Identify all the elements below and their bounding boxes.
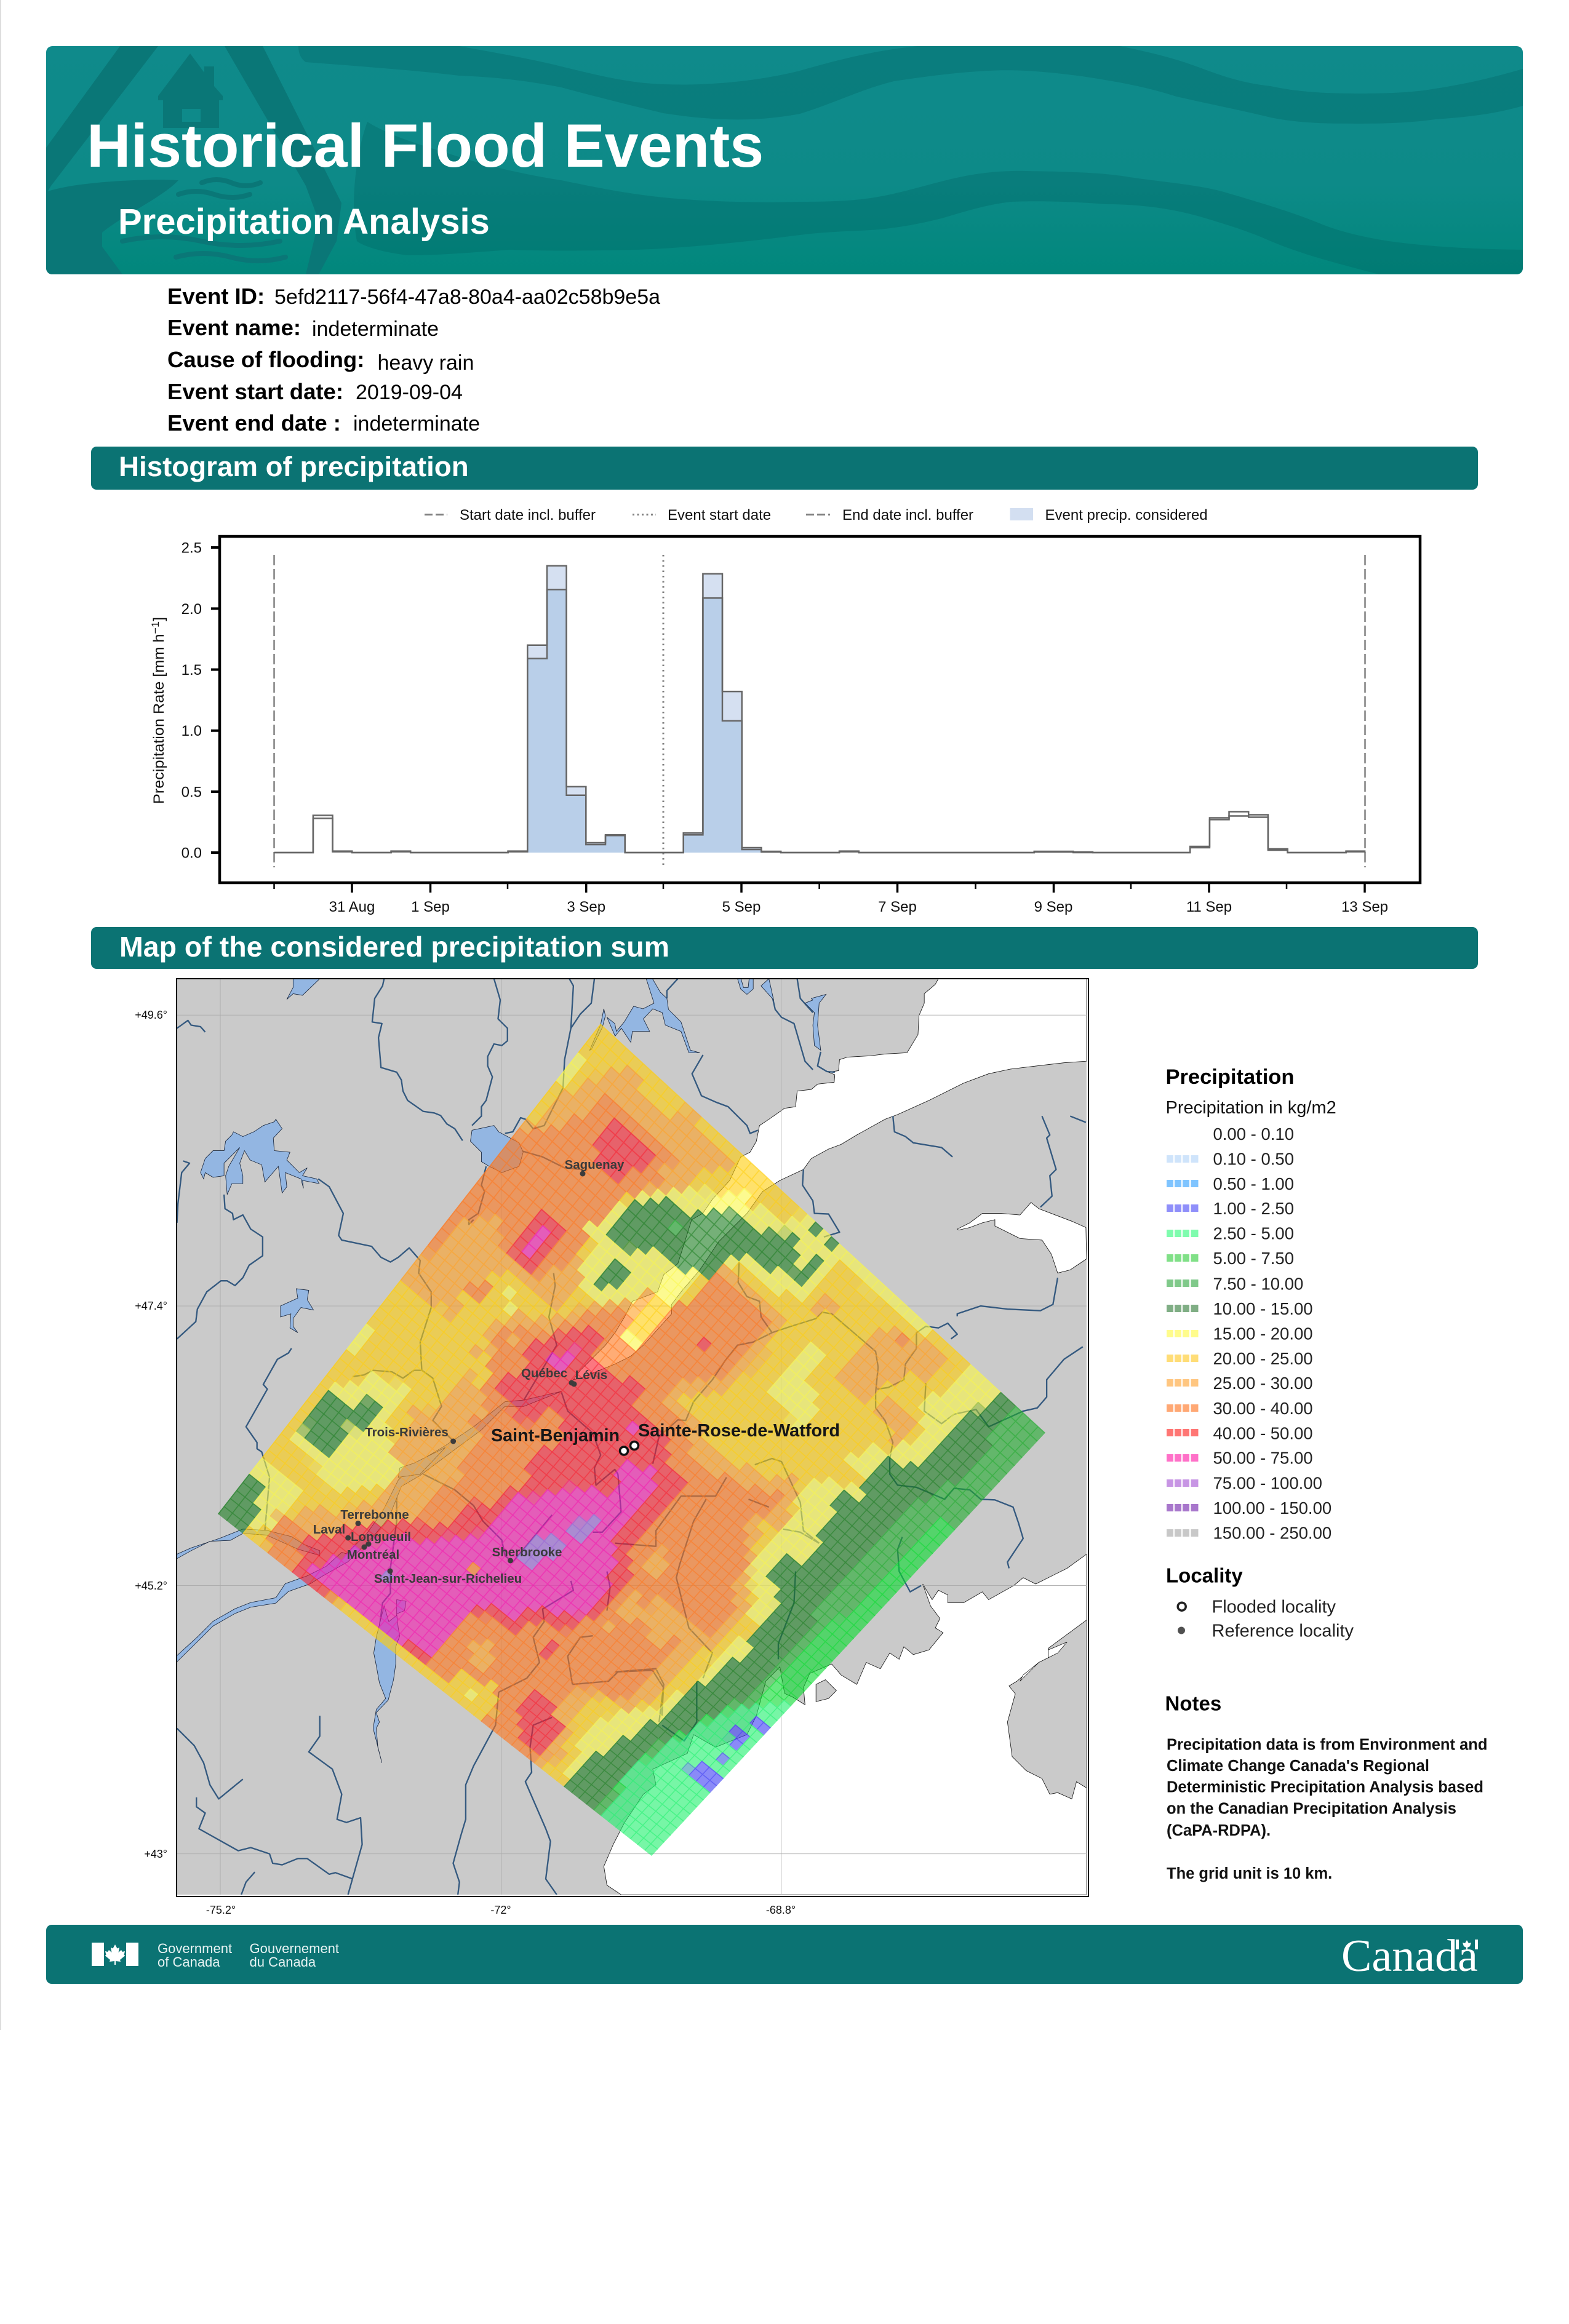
event start date: Event start date: [167, 379, 343, 404]
reference locality names: Saint-Jean-sur-Richelieu [374, 1572, 522, 1586]
cause of flooding: heavy rain [378, 351, 474, 375]
x axis ticks and labels: 13 Sep [1341, 899, 1388, 915]
x axis ticks and labels: 7 Sep [878, 899, 917, 915]
wave bands [298, 46, 1523, 274]
header banner [46, 46, 1523, 274]
event end date [167, 410, 480, 436]
legend rows: 0.50 - 1.00 [1213, 1174, 1294, 1193]
notes [1165, 1692, 1487, 1882]
Canada wordmark: Canada [1341, 1931, 1478, 1981]
y axis title: −1 [150, 621, 161, 634]
event end date: indeterminate [353, 412, 480, 436]
government of Canada signature [158, 1941, 339, 1970]
reference locality names: Terrebonne [340, 1508, 409, 1522]
legend rows: 100.00 - 150.00 [1213, 1498, 1331, 1518]
event name: Event name: [167, 315, 301, 340]
notes text [1167, 1736, 1487, 1882]
notes text: Deterministic Precipitation Analysis based [1167, 1779, 1483, 1796]
chart frame [220, 536, 1420, 883]
lakes and St Lawrence river [177, 979, 826, 1763]
cause of flooding [167, 347, 474, 375]
reference locality names: Sherbrooke [492, 1545, 562, 1559]
notes text: on the Canadian Precipitation Analysis [1167, 1800, 1456, 1817]
reference locality names: Saguenay [565, 1158, 625, 1172]
map frame [176, 978, 1089, 1897]
reference locality entry: Reference locality [1212, 1622, 1354, 1641]
section heading: histogram [91, 447, 1478, 490]
legend rows: 1.00 - 2.50 [1213, 1199, 1294, 1218]
reference locality names: Québec [521, 1366, 567, 1380]
government of Canada signature: Gouvernement [250, 1941, 339, 1956]
flooded locality names: Saint-Benjamin [491, 1426, 620, 1446]
x axis ticks and labels: 11 Sep [1186, 899, 1232, 915]
event start date [167, 379, 463, 404]
x axis ticks and labels: 9 Sep [1034, 899, 1072, 915]
chart legend: Event start date [668, 507, 771, 523]
legend rows: 15.00 - 20.00 [1213, 1324, 1313, 1343]
legend rows: 40.00 - 50.00 [1213, 1423, 1313, 1443]
map: base geography [177, 979, 1087, 1895]
subtitle: Precipitation Analysis [118, 202, 490, 242]
legend rows: 10.00 - 15.00 [1213, 1299, 1313, 1318]
chart legend [425, 507, 1208, 523]
notes heading: Notes [1165, 1692, 1221, 1715]
latitude labels: +49.6° [135, 1009, 167, 1021]
y axis ticks and labels: 2.5 [182, 540, 202, 556]
reference locality names: Trois-Rivières [365, 1425, 449, 1439]
legend title: Precipitation [1165, 1065, 1294, 1089]
legend rows: 30.00 - 40.00 [1213, 1399, 1313, 1418]
y axis title: Precipitation Rate [mm h [151, 642, 167, 804]
x axis ticks and labels: 31 Aug [329, 899, 375, 915]
Nova Scotia and islands [816, 1620, 1087, 1799]
flooded locality markers [620, 1442, 639, 1455]
x axis ticks and labels [274, 884, 1388, 915]
locality heading: Locality [1166, 1564, 1243, 1587]
icon: Canadian flag [92, 1943, 138, 1966]
section heading: map: Map of the considered precipitation sum [119, 931, 669, 963]
latitude labels [135, 1009, 167, 1860]
latitude labels: +43° [144, 1848, 167, 1860]
icon: flood warning triangle and house [46, 46, 341, 274]
legend rows: 50.00 - 75.00 [1213, 1448, 1313, 1468]
flooded locality names [491, 1421, 840, 1446]
gulf of St Lawrence and Atlantic [573, 979, 1087, 1895]
reference locality names: Montréal [347, 1548, 399, 1562]
legend rows [1167, 1124, 1331, 1543]
date reference lines [274, 555, 1365, 867]
government of Canada signature: of Canada [158, 1954, 220, 1970]
title: Historical Flood Events [87, 111, 764, 180]
event id: 5efd2117-56f4-47a8-80a4-aa02c58b9e5a [274, 285, 660, 309]
event start date: 2019-09-04 [356, 381, 463, 404]
event end date: Event end date : [167, 410, 341, 436]
rivers [177, 979, 1086, 1895]
government of Canada signature: du Canada [250, 1954, 316, 1970]
reference localities [345, 1171, 586, 1574]
y axis ticks and labels: 0.0 [182, 845, 202, 861]
longitude labels [206, 1904, 796, 1916]
event id: Event ID: [167, 284, 265, 309]
reference locality names [313, 1158, 625, 1586]
longitude labels: -72° [490, 1904, 511, 1916]
notes text: Precipitation data is from Environment and [1167, 1736, 1487, 1753]
longitude labels: -75.2° [206, 1904, 236, 1916]
footer band [46, 1525, 1523, 1984]
chart legend: Start date incl. buffer [460, 507, 596, 523]
legend rows: 2.50 - 5.00 [1213, 1224, 1294, 1243]
graticule [177, 979, 1087, 1895]
government of Canada signature: Government [158, 1941, 232, 1956]
y axis ticks and labels: 0.5 [182, 784, 202, 801]
reference locality names: Lévis [575, 1368, 607, 1382]
y axis ticks and labels [182, 540, 220, 861]
x axis ticks and labels: 5 Sep [722, 899, 761, 915]
legend subtitle: Precipitation in kg/m2 [1165, 1098, 1336, 1118]
x axis ticks and labels: 3 Sep [567, 899, 605, 915]
cause of flooding: Cause of flooding: [167, 347, 364, 372]
legend: precipitation [1165, 1065, 1336, 1543]
legend rows: 150.00 - 250.00 [1213, 1523, 1331, 1543]
reference locality names: Longueuil [351, 1530, 411, 1544]
event name: indeterminate [312, 317, 439, 341]
legend rows: 25.00 - 30.00 [1213, 1374, 1313, 1393]
event name [167, 315, 439, 341]
flooded locality names: Sainte-Rose-de-Watford [638, 1421, 840, 1441]
section heading: map [91, 927, 1478, 969]
latitude labels: +47.4° [135, 1300, 167, 1312]
event details [167, 284, 661, 436]
latitude labels: +45.2° [135, 1580, 167, 1592]
legend rows: 0.10 - 0.50 [1213, 1149, 1294, 1169]
chart: precipitation histogram [150, 507, 1421, 915]
y axis ticks and labels: 1.0 [182, 723, 202, 739]
notes text: Climate Change Canada's Regional [1167, 1757, 1429, 1775]
legend: locality [1166, 1564, 1354, 1641]
section heading: histogram: Histogram of precipitation [119, 451, 469, 482]
flooded locality entry: Flooded locality [1212, 1597, 1336, 1617]
x axis ticks and labels: 1 Sep [411, 899, 450, 915]
notes text: The grid unit is 10 km. [1167, 1865, 1332, 1882]
legend rows: 75.00 - 100.00 [1213, 1474, 1322, 1492]
legend rows: 0.00 - 0.10 [1213, 1124, 1294, 1144]
y axis ticks and labels: 2.0 [182, 601, 202, 618]
page edge line [0, 0, 1, 2030]
histogram step outlines [274, 566, 1365, 853]
histogram fill: event precipitation considered [527, 566, 761, 853]
reference locality names: Laval [313, 1522, 345, 1537]
map: precipitation grid cells [218, 1024, 1045, 1856]
chart legend: End date incl. buffer [842, 507, 973, 523]
legend rows: 20.00 - 25.00 [1213, 1349, 1313, 1368]
y axis title: ] [151, 617, 167, 621]
y axis ticks and labels: 1.5 [182, 662, 202, 678]
chart legend: Event precip. considered [1045, 507, 1208, 523]
longitude labels: -68.8° [766, 1904, 796, 1916]
legend rows: 5.00 - 7.50 [1213, 1249, 1294, 1268]
legend rows: 7.50 - 10.00 [1213, 1275, 1303, 1293]
notes text: (CaPA-RDPA). [1167, 1822, 1271, 1839]
